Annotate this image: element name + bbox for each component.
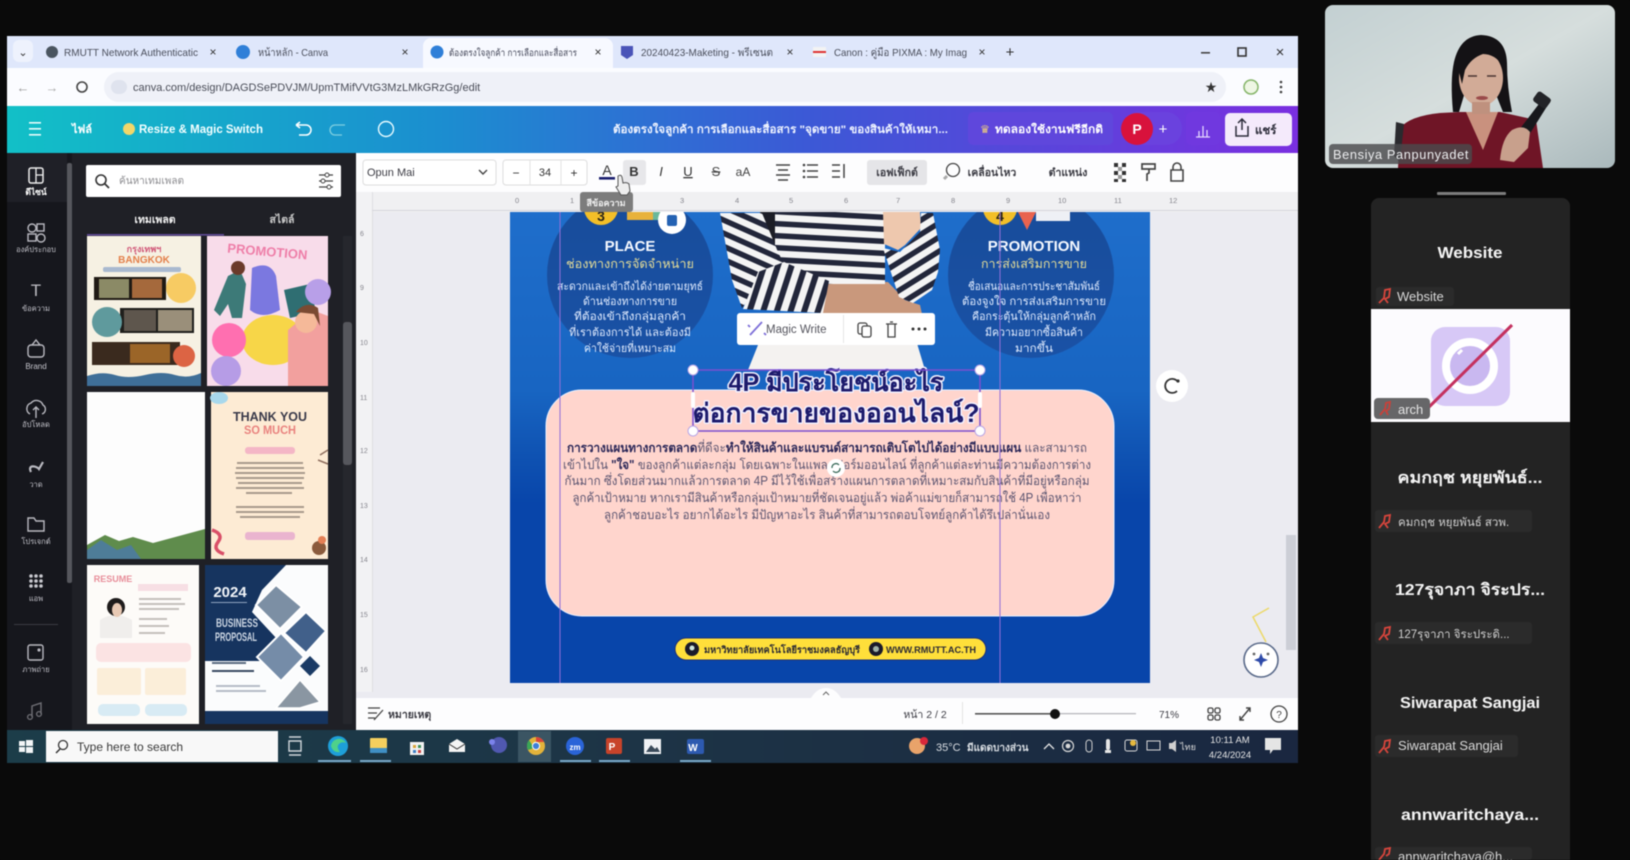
address bar: →	[46, 80, 58, 95]
transparency icon	[1114, 163, 1126, 182]
ruler: 9	[1006, 196, 1010, 205]
panel: place: ที่เราต้องการได้ และต้องมี	[569, 324, 691, 339]
bottom status bar: 71%	[1159, 710, 1179, 721]
body text	[563, 439, 1091, 523]
ruler: 10	[1058, 196, 1066, 205]
participant tile: arch	[1371, 309, 1570, 422]
browser tab strip: ×	[978, 45, 986, 59]
bottom status bar: หน้า 2 / 2	[903, 709, 947, 721]
browser tab strip: ต้องตรงใจลูกค้า การเลือกและสื่อสาร	[449, 46, 577, 59]
template thumbnail: business proposal: PROPOSAL	[215, 632, 257, 644]
magic write floating toolbar	[737, 313, 935, 345]
body text: เข้าไปใน "ใจ" ของลูกค้าแต่ละกลุ่ม โดยเฉพาะในแพลตฟอร์มออนไลน์ ที่ลูกค้าแต่ละท่านมีความต้องการต่าง	[563, 456, 1091, 473]
panel scrollbar	[343, 236, 352, 724]
taskbar app icons: zm	[569, 743, 581, 752]
search box: ค้นหาเทมเพลต	[119, 175, 184, 187]
participant: Rujapha	[1375, 581, 1545, 644]
panel: promotion: ต้องจูงใจ การส่งเสริมการขาย	[962, 295, 1106, 308]
text format buttons: A	[602, 162, 612, 178]
ruler: 9	[360, 285, 364, 292]
rotate handle	[827, 459, 845, 477]
footer pill: WWW.RMUTT.AC.TH	[886, 645, 976, 656]
panel: place: ที่ต้องเข้าถึงกลุ่มลูกค้า	[574, 308, 686, 323]
video tile: presenter	[1325, 5, 1615, 168]
name label: Bensiya Panpunyadet	[1333, 148, 1469, 162]
active tab	[423, 38, 613, 68]
magic write floating toolbar: Magic Write	[766, 324, 826, 336]
font selector: Opun Mai	[367, 167, 415, 179]
participant: annwaritchaya: annwaritchaya...	[1401, 807, 1539, 824]
template thumbnail: thank you: SO MUCH	[244, 423, 296, 437]
template thumbnail: business proposal: BUSINESS	[216, 618, 258, 630]
panel: place: สะดวกและเข้าถึงได้ง่ายตามยุทธ์	[557, 280, 703, 293]
magic assistant button	[1244, 643, 1278, 677]
browser tab strip: +	[1006, 44, 1015, 61]
ruler: 3	[680, 196, 684, 205]
alignment guides	[560, 212, 1000, 683]
ruler: 11	[360, 395, 367, 402]
ruler: 7	[896, 196, 900, 205]
font size control: +	[570, 166, 578, 180]
editor canvas background	[356, 210, 1298, 698]
canva header bar: Resize & Magic Switch	[139, 124, 263, 136]
panel: place	[546, 211, 714, 358]
participant: Khomkrit: คมกฤช หยุยพันธ์...	[1398, 468, 1542, 488]
left icon rail: Brand	[25, 362, 47, 371]
lock icon	[1171, 163, 1183, 181]
participants panel	[1371, 198, 1570, 860]
panel: promotion: 4	[996, 208, 1004, 224]
template thumbnail: business proposal	[205, 565, 328, 724]
browser tab strip: หน้าหลัก - Canva	[258, 47, 328, 59]
participant: annwaritchaya	[1375, 807, 1539, 860]
browser tab strip: Canon : คู่มือ PIXMA : My Imag	[834, 46, 967, 59]
left icon rail: T	[31, 281, 41, 300]
ruler: 11	[1114, 196, 1122, 205]
template thumbnail: resume	[87, 565, 199, 724]
body text: ลูกค้าเป้าหมาย หากเรามีสินค้าหรือกลุ่มเป้าหมายที่ชัดเจนอยู่แล้ว พ่อค้าแม่ขายก็สามารถใช้ 4P เพื่อหาว่า	[572, 489, 1082, 506]
browser tab strip: 20240423-Maketing - พรีเซนต	[641, 46, 773, 59]
headline: 4P มีประโยชน์อะไร	[728, 367, 944, 397]
panel: place: ช่องทางการจัดจำหน่าย	[566, 257, 694, 271]
text format buttons: I	[659, 164, 663, 179]
browser tab strip: ⌄	[18, 47, 28, 59]
ruler: 6	[844, 196, 848, 205]
ruler: 14	[360, 557, 368, 564]
ruler: 5	[789, 196, 793, 205]
system tray: 10:11 AM	[1210, 735, 1250, 746]
panel: promotion: ชื่อเสนอและการประชาสัมพันธ์	[968, 278, 1100, 293]
left icon rail: ข้อความ	[22, 304, 50, 313]
search box	[86, 165, 341, 197]
panel tabs: เทมเพลต	[134, 214, 176, 226]
footer pill: มหาวิทยาลัยเทคโนโลยีราชมงคลธัญบุรี	[704, 644, 861, 656]
ruler: 16	[360, 667, 368, 674]
ruler: 10	[360, 340, 368, 347]
headline: ต่อการขายของออนไลน์?	[692, 397, 980, 428]
search box	[46, 731, 278, 762]
address bar: canva.com/design/DAGDSePDVJM/UpmTMifVVtG3MzLMkGRzGg/edit	[133, 82, 480, 94]
canva header bar: ต้องตรงใจลูกค้า การเลือกและสื่อสาร "จุดขาย" ของสินค้าให้เหมา...	[613, 121, 948, 137]
text format buttons: B	[629, 164, 639, 179]
participant: Siwarapat: Siwarapat Sangjai	[1398, 738, 1503, 753]
design page	[510, 191, 1150, 683]
address bar	[7, 68, 1298, 106]
left icon rail: อัปโหลด	[22, 420, 50, 429]
taskbar app icons	[289, 731, 711, 762]
tooltip: text color: สีข้อความ	[586, 198, 626, 208]
panel: place: ด้านช่องทางการขาย	[583, 296, 677, 308]
text format buttons: S	[712, 164, 721, 179]
panel: promotion: PROMOTION	[988, 238, 1080, 255]
panel tabs	[87, 213, 294, 236]
template thumbnail: Promotion	[207, 236, 331, 386]
bottom status bar: หมายเหตุ	[388, 709, 431, 722]
text format buttons: aA	[736, 165, 750, 179]
body panel	[546, 390, 1114, 616]
font selector	[363, 160, 496, 185]
weather widget: 35°C	[936, 742, 961, 754]
effects button: เอฟเฟ็กต์	[876, 165, 918, 179]
animate button	[944, 164, 1016, 179]
ruler: 1	[570, 196, 574, 205]
canva header bar: แชร์	[1255, 123, 1277, 137]
headline	[692, 367, 980, 428]
body text: ลูกค้าชอบอะไร อยากได้อะไร มีปัญหาอะไร สินค้าที่สามารถตอบโจทย์ลูกค้าได้รึเปล่านั่นเอง	[604, 506, 1050, 523]
ruler: 12	[1169, 196, 1177, 205]
text format buttons: U	[683, 164, 693, 179]
canva header bar	[7, 106, 1298, 153]
ruler: 12	[360, 448, 368, 455]
ruler	[356, 192, 1298, 692]
address bar: ←	[16, 80, 30, 95]
participant: Website: Website	[1397, 289, 1444, 304]
participant: Khomkrit: คมกฤช หยุยพันธ์ สวพ.	[1398, 515, 1509, 529]
browser tab strip: RMUTT Network Authenticatic	[64, 47, 198, 59]
canva header bar: P	[1132, 121, 1142, 137]
address bar: ★	[1205, 79, 1217, 95]
system tray	[1044, 735, 1281, 761]
panel: promotion	[948, 211, 1114, 358]
ruler: 13	[360, 503, 368, 510]
canva header bar: ทดลองใช้งานฟรีอีกดิ	[995, 122, 1103, 136]
model in striped top	[720, 212, 940, 370]
ruler: 8	[951, 196, 955, 205]
ruler: 0	[515, 196, 519, 205]
footer pill	[675, 638, 986, 660]
browser tab strip: ×	[594, 45, 602, 59]
left icon rail: ภาพถ่าย	[22, 665, 50, 674]
canva header bar: ไฟล์	[70, 122, 92, 136]
editor toolbar	[356, 153, 1298, 192]
template thumbnail: Promotion: PROMOTION	[227, 241, 308, 262]
template thumbnail: Bangkok: BANGKOK	[118, 255, 171, 266]
template thumbnail: thank you: THANK YOU	[233, 409, 307, 424]
annotation mark	[1253, 608, 1269, 642]
panel tabs: สไตล์	[270, 213, 294, 226]
participant: Website: Website	[1438, 245, 1503, 262]
ruler: 6	[360, 231, 364, 238]
font size control: −	[512, 166, 520, 180]
windows taskbar	[7, 730, 1298, 763]
participant: Siwarapat	[1375, 695, 1540, 757]
panel: promotion: คือกระตุ้นให้กลุ่มลูกค้าหลัก	[972, 310, 1096, 323]
browser tab strip: ×	[209, 45, 217, 59]
ruler: 15	[360, 612, 368, 619]
animate button: เคลื่อนไหว	[968, 164, 1016, 179]
panel: promotion: การส่งเสริมการขาย	[981, 257, 1087, 271]
participant: Website	[1376, 245, 1503, 306]
taskbar app icons: W	[688, 743, 698, 754]
system tray: 4/24/2024	[1209, 750, 1251, 761]
browser tab strip	[7, 36, 1298, 68]
template thumbnail: resume: RESUME	[94, 574, 132, 584]
participant: Rujapha: 127รุจาภา จิระประดิ...	[1398, 628, 1510, 641]
panel: place: PLACE	[605, 238, 655, 255]
template thumbnail: Bangkok: กรุงเทพฯ	[127, 244, 161, 255]
presenter figure	[1394, 35, 1552, 168]
cursor hand	[616, 175, 630, 195]
participant tile: arch: arch	[1398, 402, 1423, 417]
effects button	[867, 160, 927, 185]
participant: Siwarapat: Siwarapat Sangjai	[1400, 695, 1540, 712]
start button	[19, 740, 33, 753]
left icon rail: แอพ	[29, 594, 43, 603]
template thumbnail: thank you	[210, 392, 328, 559]
body text: การวางแผนทางการตลาดที่ดีจะทำให้สินค้าและแบรนด์สามารถเติบโตไปได้อย่างมีแบบแผน และสามารถ	[567, 439, 1087, 455]
font size control: 34	[539, 167, 551, 179]
participant: Khomkrit	[1375, 468, 1542, 532]
panel: place: 3	[597, 208, 605, 224]
paint roller icon	[1142, 164, 1155, 181]
browser tab strip: ×	[786, 45, 794, 59]
canvas scrollbar	[1286, 535, 1296, 650]
template thumbnail: Bangkok	[87, 236, 201, 386]
canva header bar: +	[1159, 121, 1168, 138]
browser tab strip: ×	[401, 45, 409, 59]
weather widget	[909, 737, 1029, 754]
body text: กันมาก ซึ่งโดยส่วนมากแล้วการตลาด 4P มีไว้ใช้เพื่อสร้างแผนการตลาดที่เหมาะสมกับสินค้าที่มีอยู่หรือกลุ่ม	[564, 472, 1090, 489]
text selection box	[688, 365, 985, 436]
position button: ตำแหน่ง	[1049, 167, 1087, 179]
left icon rail: ดีไซน์	[25, 187, 47, 197]
left icon rail: องค์ประกอบ	[16, 245, 56, 254]
canva header bar: ♛	[980, 124, 990, 136]
comment button	[1156, 370, 1188, 402]
taskbar app icons: P	[609, 742, 616, 753]
template thumbnail: blank landscape	[87, 392, 205, 559]
bottom status bar	[356, 688, 1298, 730]
ruler: 4	[735, 196, 739, 205]
panel collapse handle	[356, 412, 365, 486]
panel: place: ค่าใช้จ่ายที่เหมาะสม	[584, 340, 676, 355]
tooltip: text color	[580, 192, 633, 212]
weather widget: มีแดดบางส่วน	[967, 742, 1029, 754]
left icon rail: โปรเจกต์	[21, 537, 51, 546]
system tray: ไทย	[1179, 742, 1196, 752]
gallery drag handle	[1437, 192, 1506, 195]
font size control	[503, 160, 587, 185]
search box: Type here to search	[77, 740, 183, 754]
template panel	[72, 153, 365, 730]
template thumbnail: business proposal: 2024	[213, 584, 247, 601]
left icon rail	[7, 153, 72, 730]
left icon rail: วาด	[29, 480, 43, 489]
panel: promotion: มากขึ้น	[1015, 340, 1054, 355]
panel: promotion: มีความอยากซื้อสินค้า	[985, 324, 1083, 339]
participant: Rujapha: 127รุจาภา จิระปร...	[1395, 581, 1545, 600]
bottom status bar: ?	[1276, 710, 1282, 721]
text format buttons	[599, 160, 844, 185]
name label	[1329, 144, 1472, 164]
browser tab strip: ×	[1276, 44, 1284, 61]
